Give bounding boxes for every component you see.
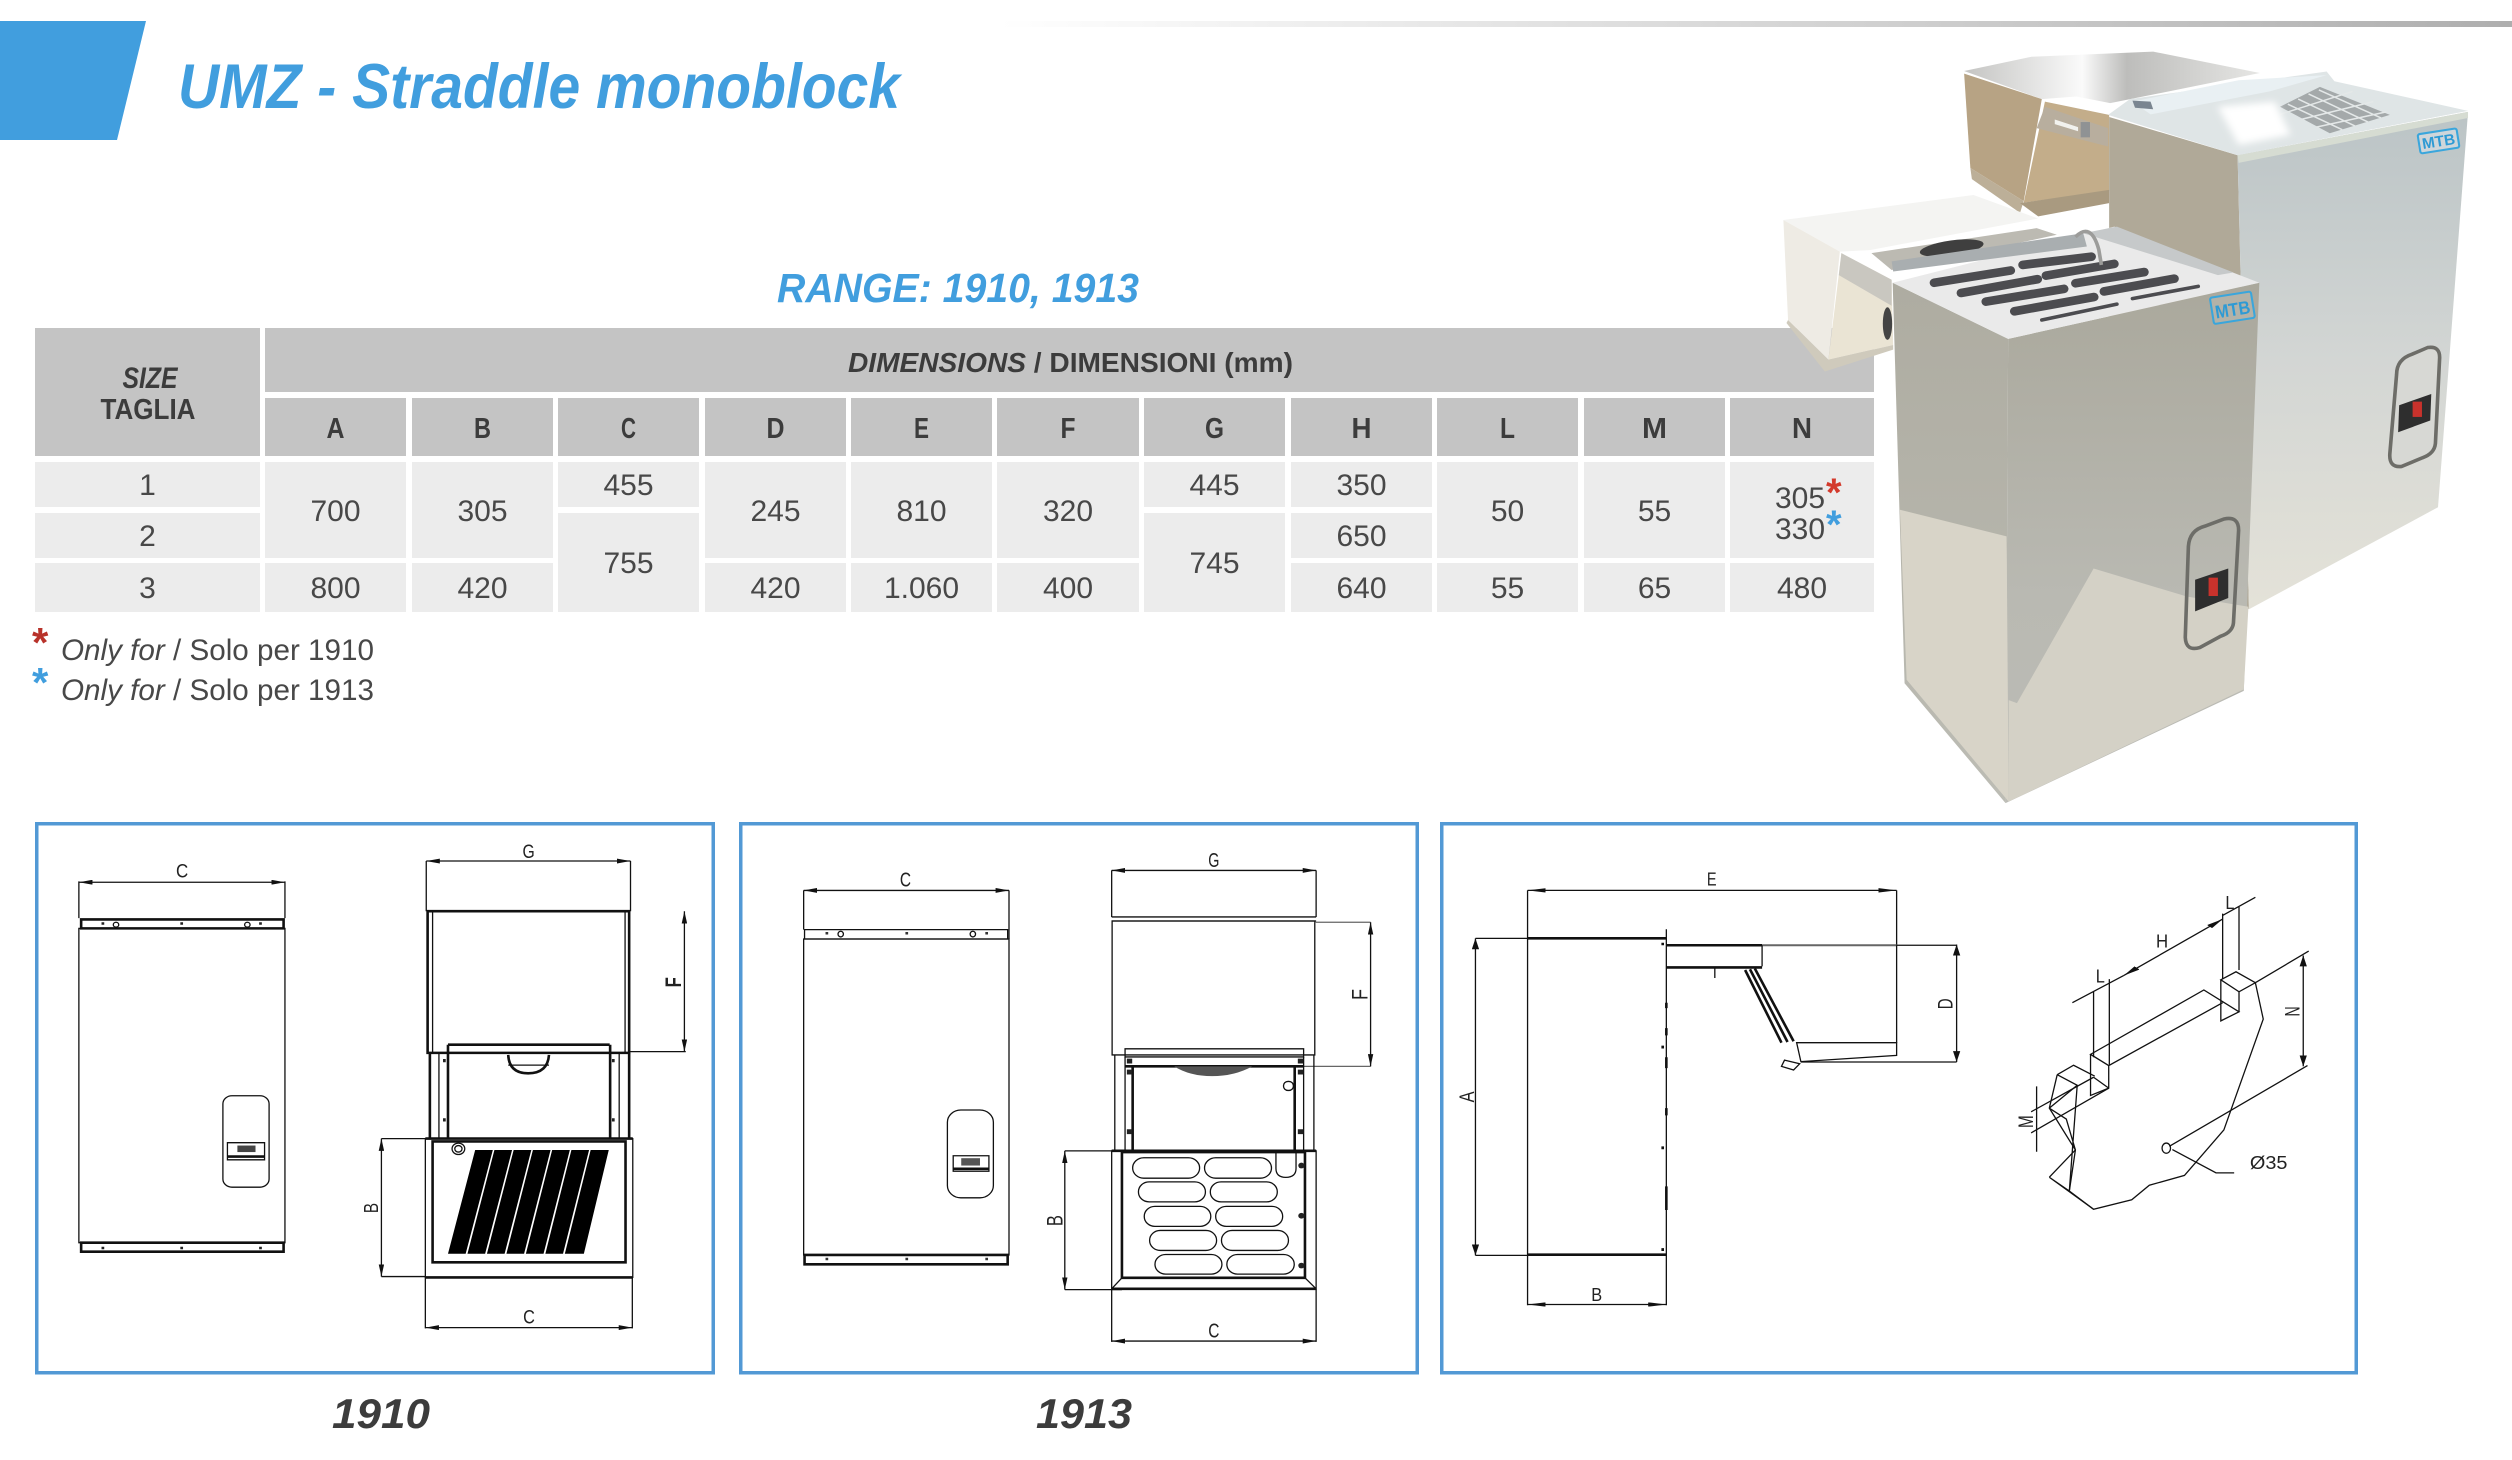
data values: 55 (1638, 495, 1671, 528)
label: 1913: 1913 (1036, 1390, 1132, 1437)
front unit body (1892, 227, 2259, 803)
decorative header rule (1000, 21, 2512, 27)
front view (804, 869, 1009, 1264)
column letters: L (1500, 413, 1515, 445)
data values: 810 (896, 495, 947, 528)
blue header tab (0, 21, 146, 140)
data values: 245 (750, 495, 801, 528)
panel frame (741, 824, 1417, 1373)
data values: 800 (310, 572, 361, 605)
rear view (361, 841, 686, 1328)
data values: 420 (457, 572, 508, 605)
front unit hood (1783, 195, 2057, 372)
column letters: A (326, 413, 345, 445)
front view (79, 860, 285, 1252)
drilling template drawing: L (2225, 891, 2234, 913)
rear view: G (1208, 849, 1219, 872)
drilling template drawing (2014, 891, 2309, 1209)
rear view: B (1043, 1215, 1068, 1226)
data values: 320 (1043, 495, 1093, 528)
header: size / taglia: TAGLIA (100, 394, 196, 426)
rear unit controller (2390, 347, 2440, 467)
title: UMZ - Straddle monoblock (178, 52, 903, 122)
header: dimensions: DIMENSIONS / DIMENSIONI (mm) (848, 347, 1293, 378)
column letters: G (1205, 413, 1224, 445)
data values: 755 (603, 547, 654, 580)
data values: 455 (603, 469, 654, 502)
side view drawing: D (1933, 998, 1957, 1009)
panel: 1913 drawing (741, 824, 1417, 1373)
dimensions table (35, 328, 1874, 612)
column letters: C (621, 413, 636, 445)
table header cells (35, 328, 1874, 456)
data values: 445 (1189, 469, 1240, 502)
1913 technical drawing (804, 849, 1373, 1342)
hole size label: Ø35 (2250, 1152, 2287, 1174)
rear unit hood (1964, 52, 2260, 216)
side view drawing: E (1707, 868, 1717, 890)
data values: 420 (750, 572, 801, 605)
front view: C (176, 860, 188, 882)
data values: 480 (1777, 572, 1827, 605)
footnotes: * (32, 659, 49, 706)
data values: 1 (139, 469, 156, 502)
column letters (326, 413, 1812, 445)
data values: * (1826, 471, 1842, 515)
column letters: N (1792, 413, 1812, 445)
column letters: H (1352, 413, 1372, 445)
header: size / taglia: SIZE (122, 362, 178, 395)
data values: 55 (1491, 572, 1524, 605)
front unit logo: MTB (2214, 296, 2252, 322)
front unit controller (2185, 518, 2239, 648)
side view drawing: A (1455, 1091, 1479, 1102)
column letters: D (766, 413, 784, 445)
data values: 330 (1775, 513, 1825, 546)
drilling template drawing: H (2156, 930, 2168, 952)
rear view: C (1208, 1319, 1219, 1342)
side view drawing (1455, 868, 1957, 1305)
data values: 700 (310, 495, 361, 528)
rear view: B (361, 1203, 383, 1213)
data values: 305 (1775, 482, 1825, 515)
data values: 745 (1189, 547, 1240, 580)
data values: 3 (139, 572, 156, 605)
data values: 305 (457, 495, 508, 528)
rear unit logo: MTB (2421, 131, 2456, 153)
footnotes (32, 619, 374, 707)
column letters: E (914, 413, 929, 445)
drilling template drawing: L (2096, 965, 2105, 987)
column letters: B (474, 413, 491, 445)
panel: side view and template drawing (1442, 824, 2356, 1373)
rear view: G (522, 841, 535, 862)
rear view: C (523, 1306, 535, 1328)
header: size / taglia (100, 362, 196, 426)
range heading: RANGE: 1910, 1913 (777, 265, 1139, 311)
data values: 650 (1336, 520, 1387, 553)
rear view (1043, 849, 1373, 1342)
rear view: F (660, 977, 686, 987)
footnotes: Only for / Solo per 1913 (61, 674, 374, 707)
side view drawing: B (1591, 1283, 1602, 1305)
data values: 1.060 (884, 572, 959, 605)
rear view: F (1348, 989, 1373, 1000)
front unit tank slots (1934, 257, 2198, 320)
drilling template drawing: M (2014, 1115, 2038, 1128)
data values: 2 (139, 520, 156, 553)
panel frame (1442, 824, 2356, 1373)
1910 technical drawing (79, 841, 686, 1328)
panel: 1910 drawing (37, 824, 713, 1373)
data values: 65 (1638, 572, 1671, 605)
data values: 400 (1043, 572, 1093, 605)
label: 1910: 1910 (332, 1390, 430, 1437)
data values: 640 (1336, 572, 1387, 605)
data values: * (1826, 503, 1842, 547)
panel frame (37, 824, 713, 1373)
column letters: M (1642, 413, 1667, 445)
drilling template drawing: N (2280, 1006, 2304, 1017)
rear unit body (2108, 72, 2468, 609)
footnotes: Only for / Solo per 1910 (61, 634, 374, 667)
footnotes: * (32, 619, 49, 666)
data values: 350 (1336, 469, 1387, 502)
column letters: F (1060, 413, 1076, 445)
data values (139, 469, 1842, 605)
data values: 50 (1491, 495, 1524, 528)
front view: C (900, 869, 911, 892)
front unit pipe (2075, 231, 2101, 265)
product photo: two monoblock units (1783, 52, 2468, 803)
data cell backgrounds (35, 462, 1874, 612)
